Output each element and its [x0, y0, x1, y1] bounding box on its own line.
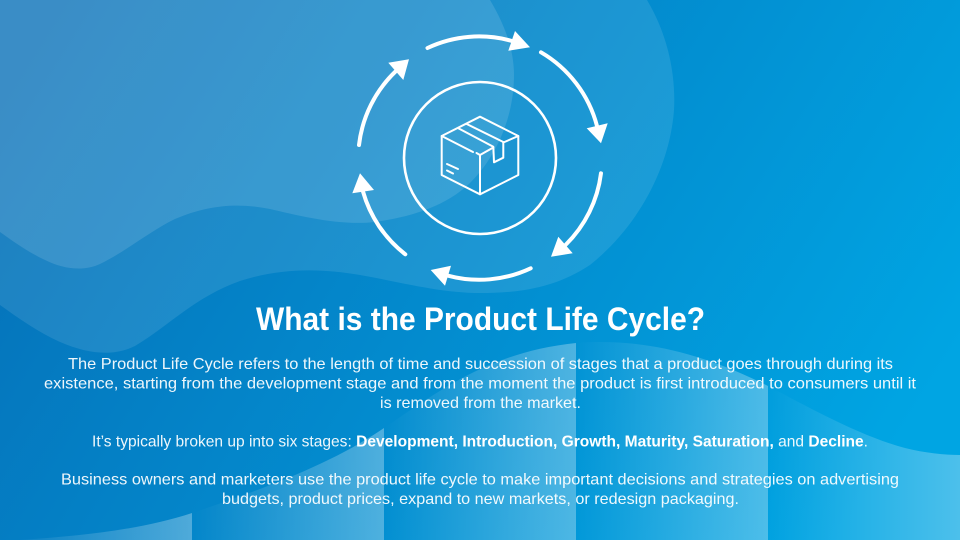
cycle diagram — [352, 31, 608, 286]
background wave: large upper shape — [0, 0, 674, 353]
inner circle — [404, 82, 556, 234]
arrow 1: top — [428, 31, 530, 51]
icon: cardboard box — [442, 117, 518, 194]
arrow 5: lower left — [352, 173, 405, 254]
description paragraph 1: existence, starting from the development stage and from the moment the product is first introduced to consumers until it — [44, 376, 917, 392]
description paragraph 3 — [61, 472, 899, 508]
arrow 2: upper right — [541, 52, 608, 143]
description paragraph 3: budgets, product prices, expand to new markets, or redesign packaging. — [222, 491, 739, 508]
description paragraph 1: The Product Life Cycle refers to the length of time and succession of stages that a product goes through during its — [68, 356, 893, 373]
arrow 3: lower right — [551, 173, 601, 257]
background wave: small upper shape — [0, 0, 514, 269]
description paragraph 2: six stages: It’s typically broken up into six stages: Development, Introduction, Growth, Maturity, Saturation, and Decline. — [92, 434, 868, 450]
arrow 4: bottom — [431, 266, 531, 286]
title: What is the Product Life Cycle? — [256, 301, 705, 337]
bottom bars with wave top — [0, 330, 960, 540]
description paragraph 3: Business owners and marketers use the product life cycle to make important decisions and strategies on advertising — [61, 472, 899, 488]
description paragraph 1 — [44, 356, 917, 412]
description paragraph 1: is removed from the market. — [380, 395, 581, 412]
arrow 6: upper left — [359, 59, 409, 145]
